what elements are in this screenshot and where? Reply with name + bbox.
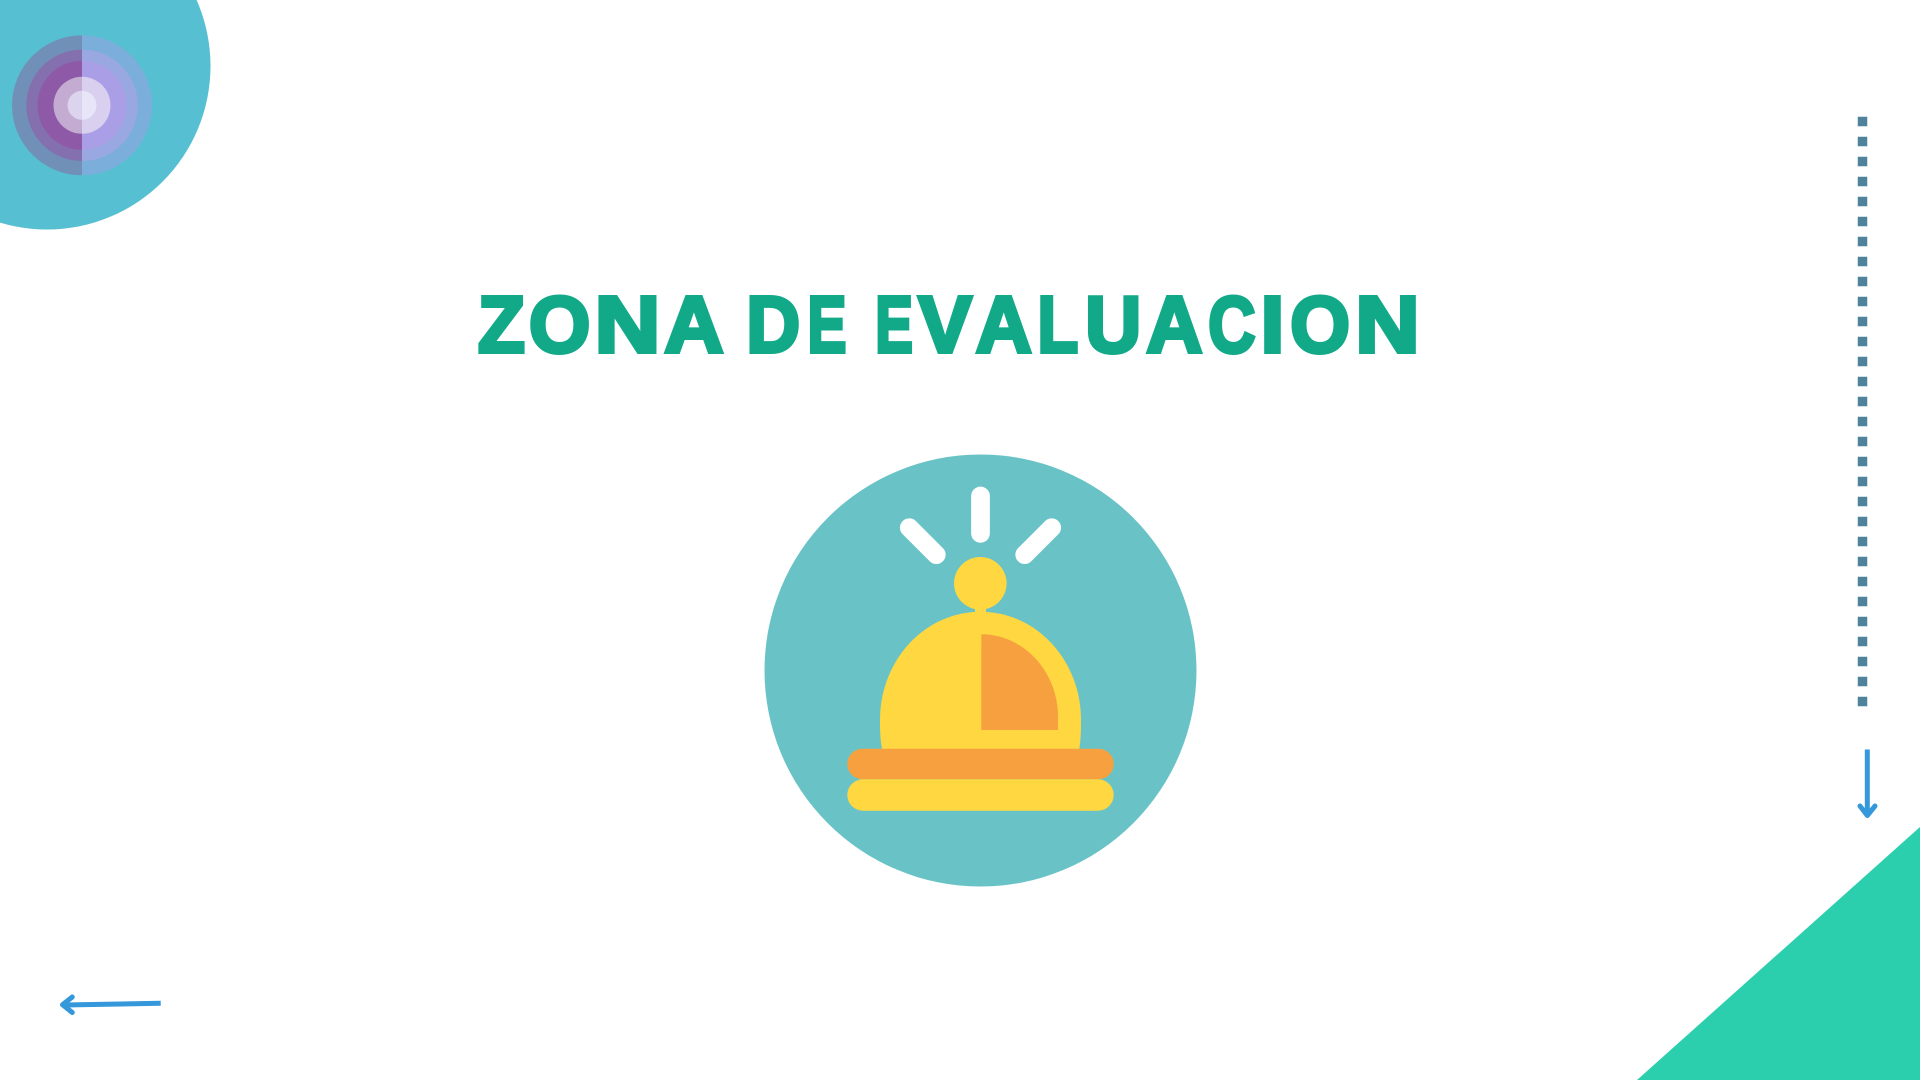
yellow base bar xyxy=(847,779,1114,811)
arrow: down xyxy=(1860,750,1875,816)
title: C xyxy=(1208,280,1256,369)
title: E xyxy=(808,280,846,369)
badge circle xyxy=(764,454,1196,886)
title: N xyxy=(595,280,660,369)
dome highlight xyxy=(981,634,1058,730)
arrow: left xyxy=(62,997,161,1012)
orange base bar xyxy=(847,749,1114,779)
dotted vertical line xyxy=(1858,117,1867,706)
bell knob xyxy=(954,557,1007,615)
title: E xyxy=(875,280,913,369)
bell dome xyxy=(880,612,1081,749)
title: U xyxy=(1085,280,1141,369)
icon: alarm bell badge xyxy=(764,454,1196,886)
title: Z xyxy=(478,280,525,369)
title: D xyxy=(746,280,800,369)
title: A xyxy=(664,280,722,369)
title: O xyxy=(529,280,590,369)
decorative corner triangle xyxy=(1637,827,1920,1080)
title: O xyxy=(1290,280,1350,369)
title: N xyxy=(1355,280,1420,369)
title: I xyxy=(1261,280,1284,369)
title: A xyxy=(1146,280,1202,369)
title: V xyxy=(918,280,972,369)
title: A xyxy=(976,280,1032,369)
alert rays xyxy=(909,496,1052,555)
title: L xyxy=(1038,280,1078,369)
icon: concentric target xyxy=(12,35,152,175)
decorative corner circle xyxy=(0,0,210,230)
